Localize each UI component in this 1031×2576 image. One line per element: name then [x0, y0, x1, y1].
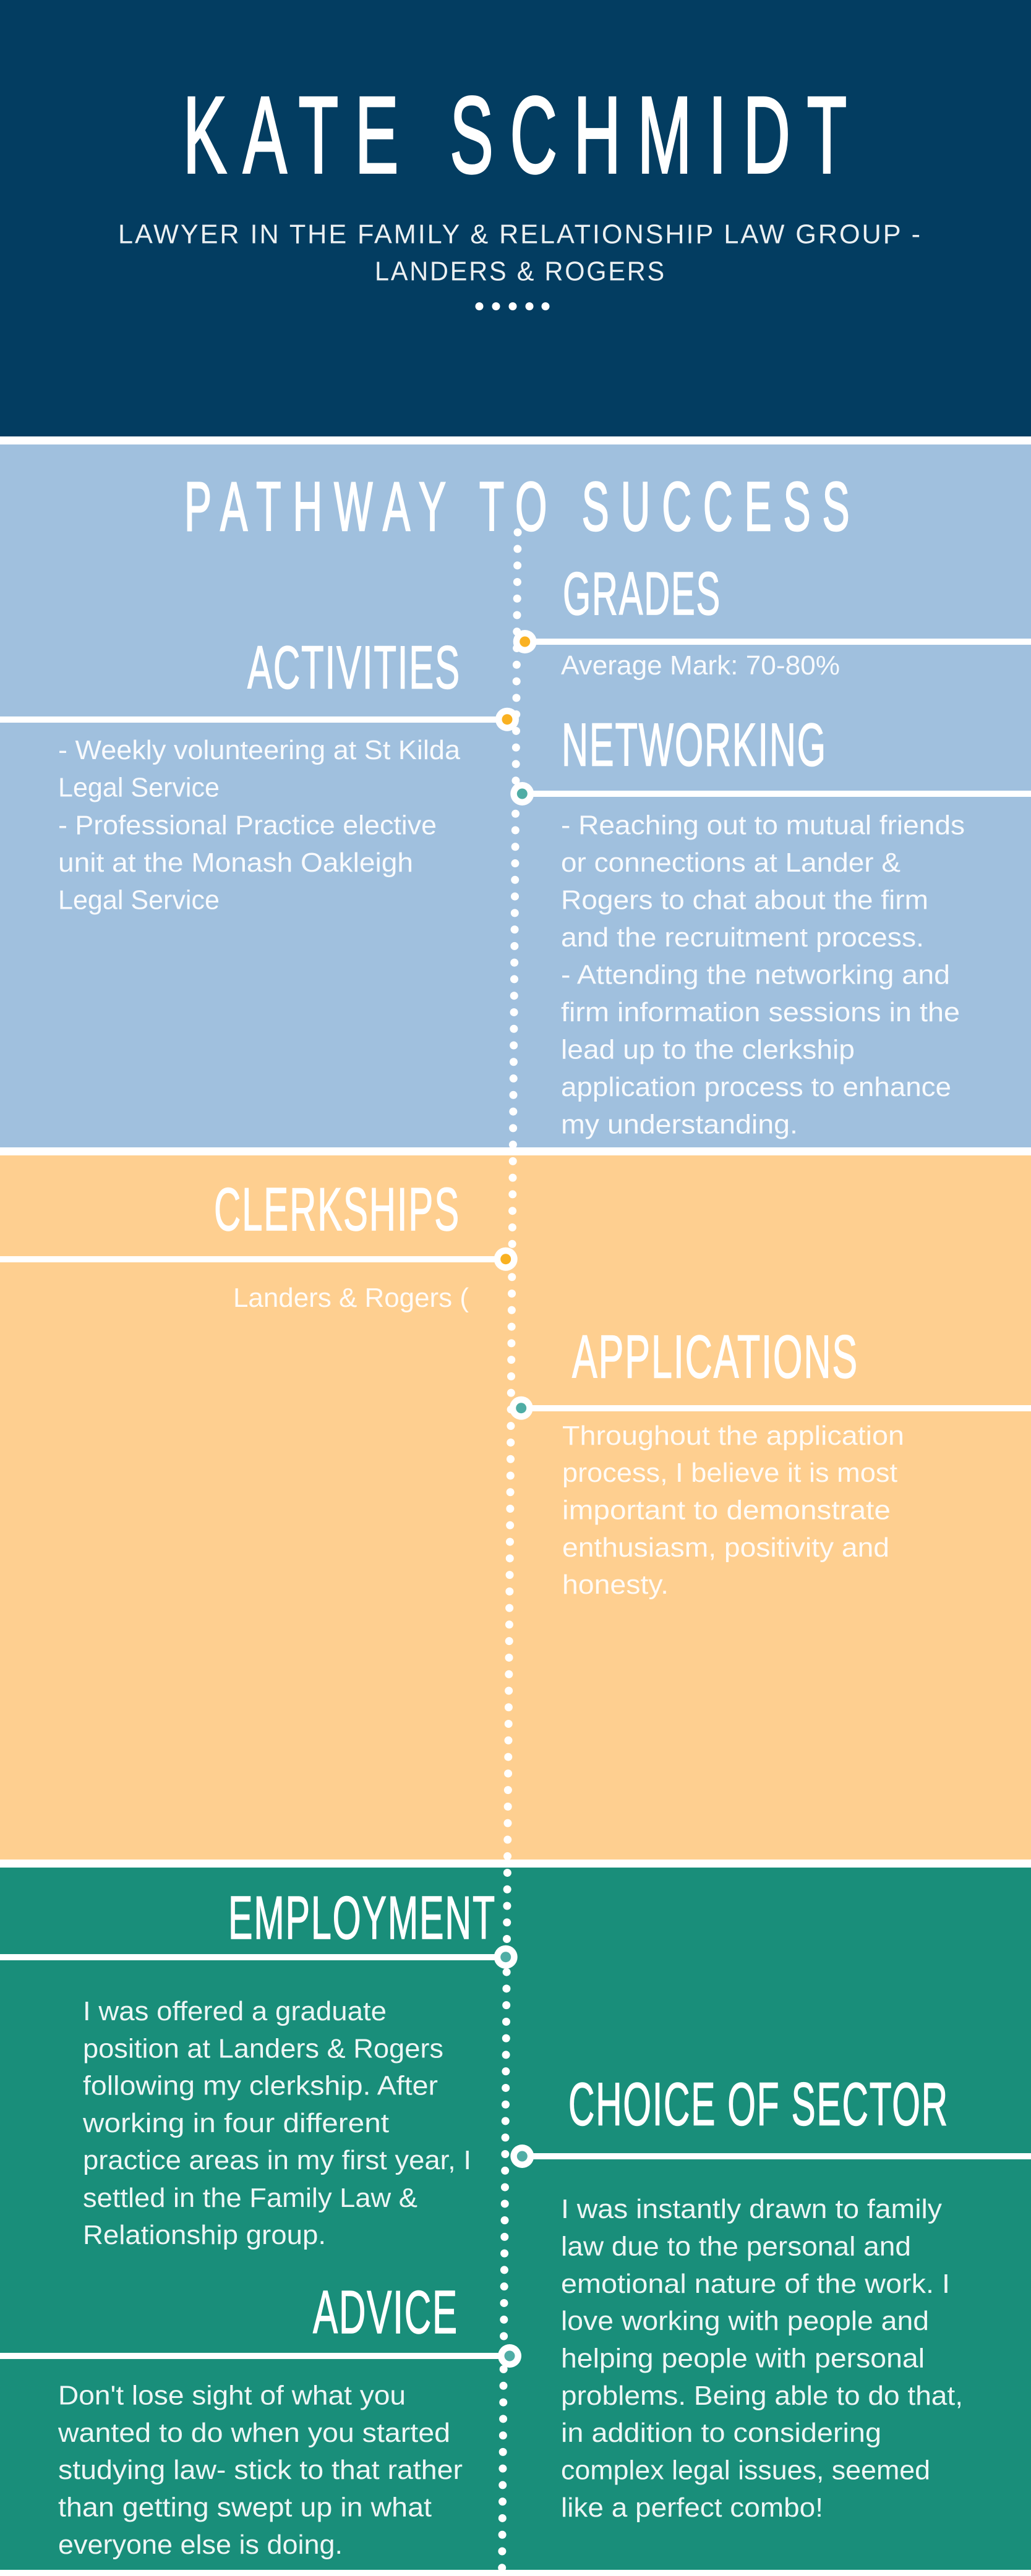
text: choice of sector: emotional nature of the work. I — [561, 2269, 950, 2299]
text: networking: Rogers to chat about the firm — [561, 885, 928, 916]
connector: applications — [521, 1405, 1031, 1411]
text: employment: working in four different — [82, 2108, 389, 2138]
text: networking: firm information sessions in the — [561, 997, 960, 1027]
text: activities: - Weekly volunteering at St Kilda — [58, 735, 461, 765]
text: choice of sector — [561, 2194, 963, 2523]
heading: networking: NETWORKING — [562, 711, 827, 779]
text: applications: enthusiasm, positivity and — [562, 1532, 889, 1563]
panel: clerkships and applications background — [0, 1155, 1031, 1860]
text: activities: Legal Service — [58, 773, 220, 802]
section: employment — [0, 1884, 518, 2250]
section: grades — [513, 559, 1031, 681]
panel: employment, sector and advice background — [0, 1868, 1031, 2570]
text: choice of sector: like a perfect combo! — [561, 2493, 823, 2523]
text: applications: process, I believe it is most — [562, 1458, 897, 1488]
connector: choice of sector — [522, 2153, 1031, 2159]
panel: pathway background — [0, 444, 1031, 1147]
text: networking: lead up to the clerkship — [561, 1035, 855, 1065]
text: clerkships: Landers & Rogers ( — [233, 1283, 469, 1313]
heading: advice: ADVICE — [313, 2278, 458, 2346]
text: networking: my understanding. — [561, 1109, 798, 1140]
text: activities: Legal Service — [58, 885, 220, 916]
subtitle: LANDERS & ROGERS — [375, 256, 666, 287]
heading: employment: EMPLOYMENT — [228, 1884, 496, 1952]
text: employment: Relationship group. — [83, 2220, 326, 2250]
text: employment: practice areas in my first year, I — [83, 2145, 471, 2175]
text: applications: important to demonstrate — [562, 1495, 891, 1526]
text: choice of sector: love working with people and — [561, 2306, 929, 2336]
text: choice of sector: law due to the personal and — [561, 2232, 911, 2261]
node: choice of sector — [510, 2145, 534, 2168]
text: networking — [561, 810, 965, 1140]
heading: grades: GRADES — [563, 559, 721, 627]
heading: activities: ACTIVITIES — [247, 633, 461, 701]
text: activities — [58, 735, 461, 916]
node: clerkships — [494, 1248, 518, 1271]
text: applications: honesty. — [562, 1570, 669, 1600]
connector: clerkships — [0, 1256, 506, 1262]
connector: grades — [524, 639, 1031, 645]
text: networking: application process to enhance — [561, 1072, 951, 1102]
node: grades — [513, 630, 537, 653]
decorative dots — [475, 302, 549, 310]
node: networking — [510, 782, 534, 806]
text: networking: - Attending the networking and — [561, 959, 950, 990]
text: applications: Throughout the application — [562, 1421, 904, 1451]
panel: header — [0, 0, 1031, 436]
heading: clerkships: CLERKSHIPS — [214, 1175, 460, 1243]
node: activities — [495, 708, 519, 731]
text: activities: - Professional Practice elective — [58, 810, 437, 841]
text: choice of sector: in addition to considering — [561, 2418, 881, 2448]
text: networking: or connections at Lander & — [561, 848, 901, 878]
node: advice — [498, 2344, 521, 2368]
node: applications — [510, 1396, 533, 1420]
text: applications — [562, 1421, 904, 1600]
text: choice of sector: complex legal issues, seemed — [561, 2455, 930, 2485]
section: activities — [0, 633, 519, 916]
section: choice of sector — [510, 2070, 1031, 2523]
subtitle: LAWYER IN THE FAMILY & RELATIONSHIP LAW GROUP - — [118, 219, 922, 250]
connector: employment — [0, 1954, 506, 1960]
text: employment: position at Landers & Rogers — [83, 2033, 443, 2064]
text: advice: everyone else is doing. — [58, 2530, 343, 2560]
section: clerkships — [0, 1175, 518, 1313]
text: activities: unit at the Monash Oakleigh — [58, 848, 413, 878]
connector: advice — [0, 2353, 510, 2359]
text: advice — [58, 2380, 463, 2560]
text: networking: - Reaching out to mutual friends — [561, 810, 965, 841]
text: grades: Average Mark: 70-80% — [561, 650, 840, 681]
text: employment: I was offered a graduate — [83, 1996, 387, 2026]
connector: networking — [522, 791, 1031, 797]
text: advice: Don't lose sight of what you — [58, 2380, 406, 2411]
text: advice: studying law- stick to that rather — [58, 2455, 463, 2485]
text: employment: settled in the Family Law & — [83, 2183, 417, 2213]
text: choice of sector: helping people with personal — [561, 2343, 925, 2374]
text: employment: following my clerkship. After — [83, 2071, 438, 2101]
section: networking — [510, 711, 1031, 1140]
text: choice of sector: I was instantly drawn to family — [561, 2194, 942, 2224]
node: employment — [494, 1945, 518, 1969]
connector: activities — [0, 716, 507, 723]
text: choice of sector: problems. Being able to do that, — [561, 2381, 963, 2411]
text: advice: than getting swept up in what — [58, 2493, 432, 2522]
text: advice: wanted to do when you started — [58, 2418, 450, 2448]
text: employment — [82, 1996, 471, 2250]
text: networking: and the recruitment process. — [561, 922, 924, 953]
subtitle — [118, 219, 922, 287]
section: applications — [510, 1323, 1031, 1600]
section: advice — [0, 2278, 521, 2560]
heading: applications: APPLICATIONS — [572, 1323, 858, 1391]
dotted timeline — [502, 532, 518, 2568]
